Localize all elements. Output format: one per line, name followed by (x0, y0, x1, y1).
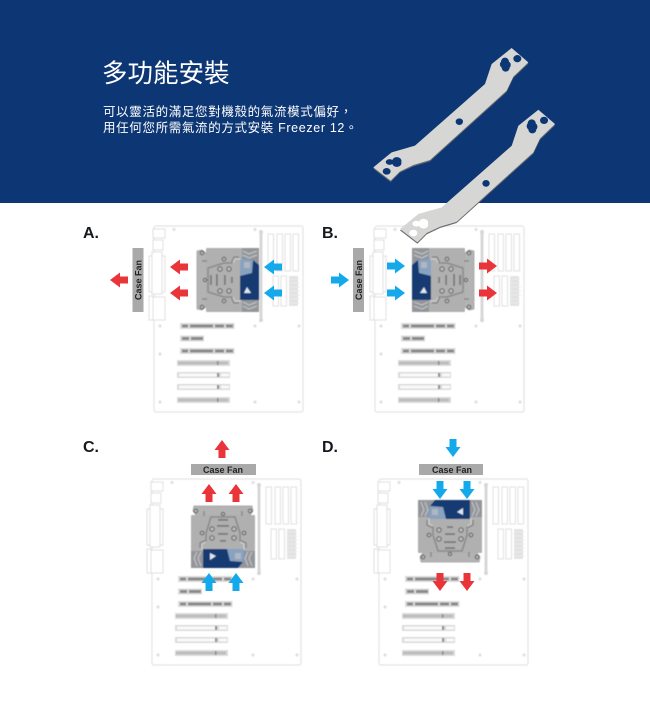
description text: 可以靈活的滿足您對機殼的氣流模式偏好， (103, 104, 353, 119)
cooler C (191, 506, 255, 568)
case fan D: Case Fan (432, 465, 472, 475)
case fan C: Case Fan (203, 465, 243, 475)
diagram C: top exhaust (83, 439, 301, 665)
arrows C (202, 440, 244, 591)
title: 多功能安裝 (102, 60, 230, 88)
header background (0, 0, 650, 203)
arrows A (110, 260, 282, 300)
case fan B (353, 248, 364, 312)
case fan A (132, 248, 144, 312)
arrows B (331, 258, 497, 300)
motherboard D (374, 479, 528, 665)
label D: D. (322, 439, 338, 456)
description text (103, 104, 358, 135)
label C: C. (83, 439, 99, 456)
description text: 用任何您所需氣流的方式安裝 Freezer 12。 (103, 120, 358, 135)
cooler D (418, 500, 482, 562)
cooler A (197, 248, 259, 312)
label B: B. (322, 225, 338, 242)
motherboard C (147, 479, 301, 665)
diagram A: rear exhaust (83, 225, 303, 412)
case fan A: Case Fan (134, 260, 144, 300)
motherboard B (370, 226, 524, 412)
diagram D: top intake (322, 439, 528, 665)
mounting bracket: lower (400, 110, 555, 244)
motherboard A (149, 226, 303, 412)
case fan D (419, 464, 483, 475)
mounting bracket: upper (373, 48, 528, 182)
arrows D (432, 439, 474, 591)
diagram B: front intake (322, 225, 524, 412)
case fan B: Case Fan (354, 260, 364, 300)
cooler B (412, 248, 474, 312)
case fan C (191, 464, 256, 475)
label A: A. (83, 225, 99, 242)
